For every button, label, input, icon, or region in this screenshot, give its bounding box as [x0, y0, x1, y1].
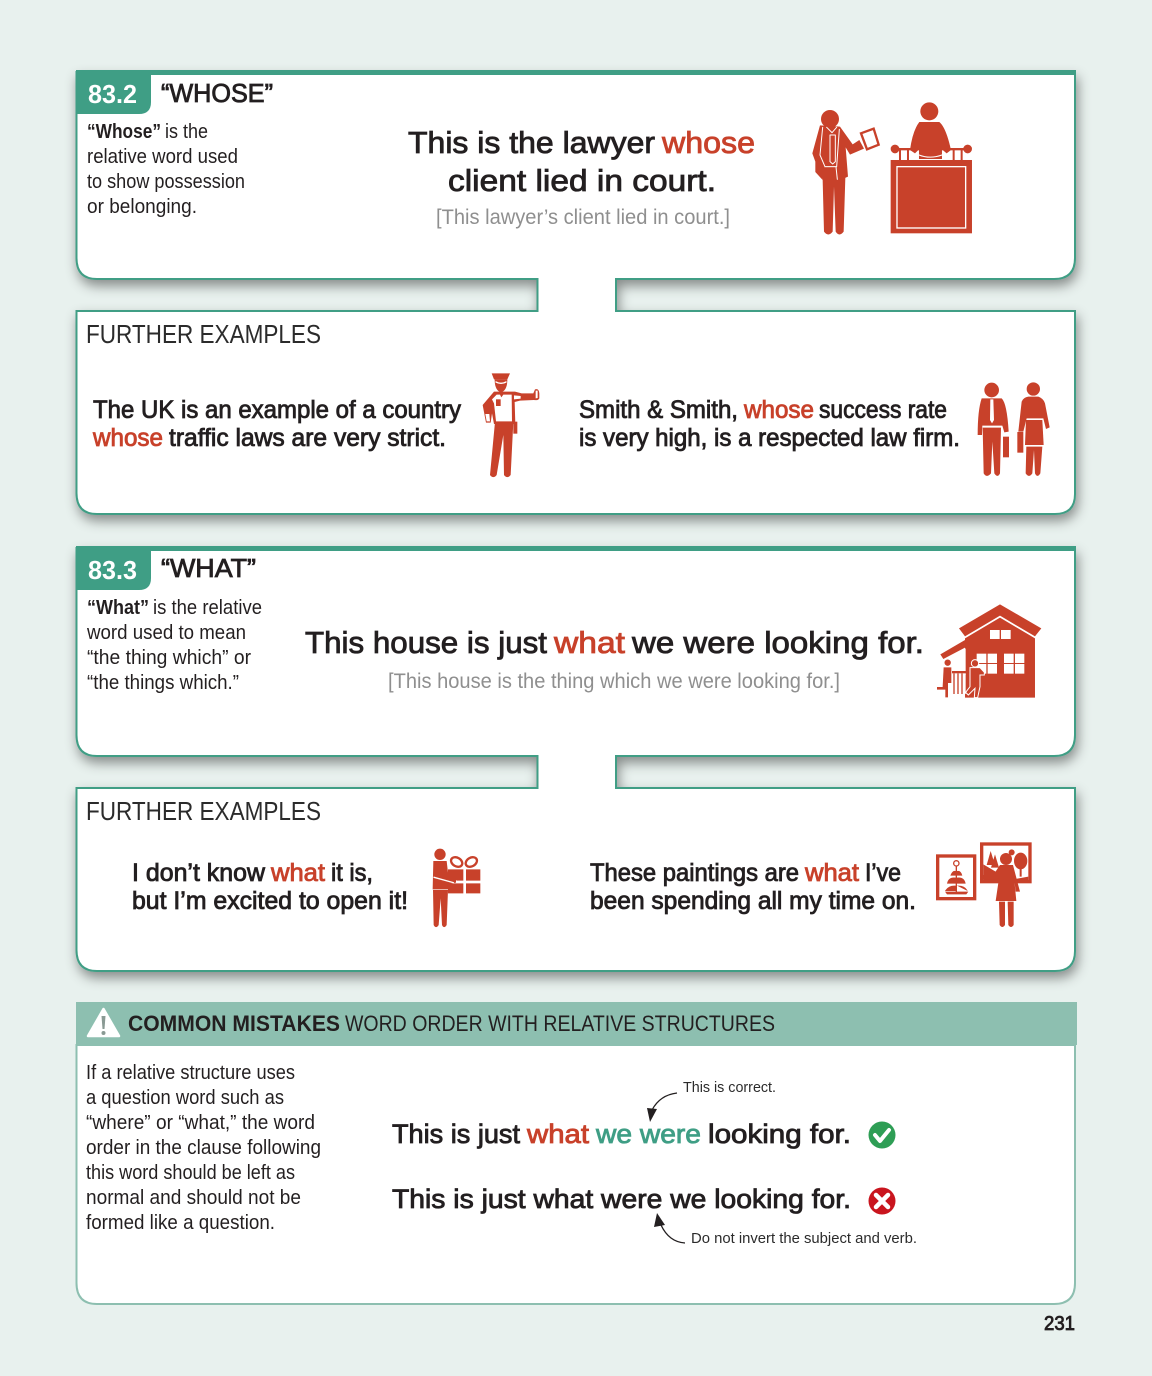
description: is the	[165, 121, 208, 143]
paraphrase: [This house is the thing which we were looking for.]	[388, 670, 840, 693]
icon: person holding gift	[433, 849, 480, 927]
explanation text: this word should be left as	[86, 1162, 295, 1184]
example: law firm: Smith & Smith,	[579, 396, 738, 424]
panel: common mistakes	[76, 1002, 1077, 1304]
header text: COMMON MISTAKES	[128, 1011, 340, 1036]
icon: green check	[868, 1122, 896, 1148]
correct sentence: This is just	[392, 1119, 520, 1149]
example: traffic laws	[92, 396, 461, 452]
explanation text: “where” or “what,” the word	[86, 1112, 315, 1134]
description: is the relative	[153, 597, 262, 619]
section number tab: 83.3	[88, 555, 137, 585]
page number: 231	[1044, 1313, 1075, 1335]
icon: lawyer and witness	[812, 102, 972, 234]
icon: two lawyers	[978, 382, 1050, 476]
description: “What”	[87, 597, 149, 619]
example: traffic laws: whose	[92, 424, 163, 452]
main example sentence	[408, 125, 755, 198]
explanation text: order in the clause following	[86, 1137, 321, 1159]
example: paintings: I’ve	[865, 859, 901, 887]
example: gift: what	[270, 859, 325, 887]
panel: 83.2 whose	[76, 70, 1076, 514]
main example sentence: This is the lawyer	[408, 125, 655, 160]
correct sentence: looking for.	[708, 1119, 851, 1149]
further examples heading: FURTHER EXAMPLES	[86, 796, 321, 826]
heading: “WHAT”	[161, 553, 256, 583]
example: law firm: success rate	[819, 396, 947, 424]
example: traffic laws: The UK is an example of a country	[93, 396, 461, 424]
main example sentence: what	[553, 625, 625, 660]
description: “the things which.”	[87, 672, 239, 694]
section number tab: 83.2	[88, 79, 137, 109]
panel: 83.3 what	[76, 546, 1076, 971]
example: traffic laws: traffic laws are very strict.	[169, 424, 446, 452]
description: word used to mean	[86, 622, 246, 644]
example: gift: but I’m excited to open it!	[132, 887, 408, 915]
icon: warning triangle	[88, 1009, 119, 1036]
icon: red cross	[868, 1188, 896, 1214]
description: or belonging.	[87, 196, 197, 218]
main example sentence: we were looking for.	[631, 625, 924, 660]
description: to show possession	[87, 171, 245, 193]
example: paintings	[590, 859, 916, 915]
example: gift	[132, 859, 408, 915]
main example sentence: client lied in court.	[448, 163, 716, 198]
example: law firm: whose	[743, 396, 814, 424]
explanation text	[86, 1062, 321, 1234]
example: paintings: These paintings are	[590, 859, 799, 887]
heading: “WHOSE”	[161, 78, 273, 108]
icon: house with couple	[937, 604, 1041, 698]
paraphrase: [This lawyer’s client lied in court.]	[436, 206, 730, 229]
correct sentence: what	[526, 1119, 590, 1149]
description: relative word used	[87, 146, 238, 168]
explanation text: normal and should not be	[86, 1187, 301, 1209]
section number tab	[76, 74, 151, 114]
header bar	[76, 1002, 1077, 1045]
callout: this is correct	[647, 1079, 776, 1122]
callout: do not invert: Do not invert the subject and verb.	[691, 1230, 917, 1247]
example: gift: I don’t know	[132, 859, 266, 887]
example: paintings: been spending all my time on.	[590, 887, 916, 915]
callout: do not invert	[654, 1213, 917, 1247]
header text: WORD ORDER WITH RELATIVE STRUCTURES	[345, 1011, 775, 1036]
example: gift: it is,	[331, 859, 373, 887]
icon: woman and paintings	[938, 844, 1030, 927]
example: law firm	[579, 396, 960, 452]
main example sentence: This house is just	[305, 625, 547, 660]
explanation text: If a relative structure uses	[86, 1062, 295, 1084]
description: “the thing which” or	[87, 647, 251, 669]
further examples heading: FURTHER EXAMPLES	[86, 319, 321, 349]
icon: police officer	[483, 373, 539, 477]
incorrect sentence: This is just what were we looking for.	[392, 1184, 851, 1214]
correct sentence: we were	[595, 1119, 701, 1149]
explanation text: a question word such as	[86, 1087, 284, 1109]
description	[86, 597, 262, 694]
description: “Whose”	[87, 121, 161, 143]
explanation text: formed like a question.	[86, 1212, 275, 1234]
example: paintings: what	[804, 859, 859, 887]
main example sentence: whose	[661, 125, 755, 160]
example: law firm: is very high, is a respected law firm.	[579, 424, 960, 452]
section number tab	[76, 550, 151, 590]
description	[87, 121, 245, 218]
callout: this is correct: This is correct.	[683, 1079, 776, 1096]
